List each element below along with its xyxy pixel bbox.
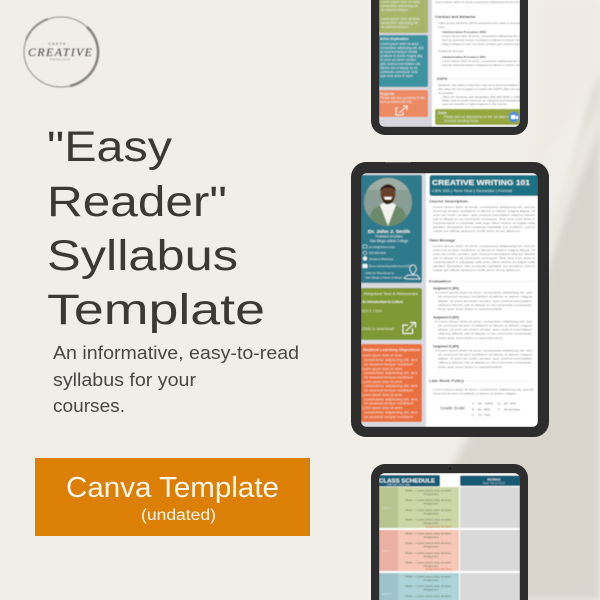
logo: Casta Creative Products [24, 17, 98, 87]
panel: teal sidebar [379, 35, 428, 87]
text: DSPS: as possible. [438, 91, 454, 95]
text: course description: reprehenderit in voluptate velit esse cillum dolore eu fugiat nulla [433, 221, 535, 225]
schedule row: unit 3: Week — Lorem ipsum dolor sit amet [405, 584, 451, 588]
text: class message: Class Message [429, 238, 455, 242]
text: conduct and behavior: Lorem ipsum dolor sit amet consectetur adipiscing elit sed do [435, 0, 519, 4]
text: evaluation assignments: ullamco laboris nisi ut aliquip ex ea commodo consequat. [438, 360, 532, 364]
text: conduct and behavior: Magna aliqua ut enim ad minim veniam quis nostrud exercit [442, 42, 524, 46]
text: course description: eiusmod tempor incididunt ut labore et dolore magna aliqua. Ut [433, 209, 535, 213]
text: DSPS: Students who believe that they may need accommodations in [438, 83, 522, 87]
text: evaluation assignments: Evaluation [429, 280, 452, 284]
header: class schedule: CBN 100 | Term Year [387, 483, 410, 487]
text: class message: pariatur. Excepteur sint occaecat cupidatat non proident, sunt in [433, 264, 535, 268]
schedule row: unit 1: Assignment [424, 492, 439, 496]
panel: orange sidebar: Please ask any questions in the [380, 96, 425, 100]
panel: teal sidebar: laboris nisi ut aliquip ex ea [380, 66, 418, 70]
text: course description [429, 200, 536, 233]
contact rows: jsmith@letters.edu [368, 245, 395, 249]
panel: instructor profile [361, 175, 422, 283]
text: conduct and behavior: Sed do eiusmod tempor incididunt ut labore et dolore magna [442, 63, 525, 67]
text: evaluation assignments: Duis aute irure dolor in reprehenderit [438, 307, 502, 311]
schedule row: unit 1: Week — Lorem ipsum dolor sit amet [405, 518, 451, 522]
text: class message: reprehenderit in voluptate velit esse cillum dolore eu fugiat nulla [433, 260, 535, 264]
text: course description: Lorem ipsum dolor sit amet, consectetur adipiscing elit, sed do [433, 205, 535, 209]
text: late work policy [429, 379, 535, 396]
text: conduct and behavior: Lorem ipsum dolor sit amet, consectetur adipiscing elit, sed do [442, 34, 528, 38]
contact rows: Student Meeting [369, 257, 393, 261]
table: grade scale: D [498, 402, 501, 406]
schedule row: unit 2: Week — Lorem ipsum dolor sit amet [405, 532, 451, 536]
text: conduct and behavior: Administrative Procedure 3001 [442, 55, 486, 59]
text: course description: pariatur. Excepteur sint occaecat cupidatat non proident, sunt in [433, 225, 535, 229]
panel: student learning objectives [361, 344, 422, 422]
schedule row: unit 1 [379, 487, 520, 528]
header: course title: CBN 100 | Term Year | Semester | Format [432, 189, 512, 193]
text: DSPS: Make sure to email instructor an official Accommodations letter as [442, 98, 532, 102]
panel: student learning objectives: Lorem ipsum dolor sit amet, [362, 354, 403, 358]
panel: instructor profile: Click for Directions to [365, 271, 394, 275]
text: class message: Lorem ipsum dolor sit amet, consectetur adipiscing elit, sed do [433, 244, 535, 248]
text: evaluation assignments: aliqua. Ut enim ad minim veniam, quis nostrud exercitation [438, 299, 532, 303]
schedule row: unit 3: Week — Lorem ipsum dolor sit amet [405, 594, 451, 598]
text: DSPS: this class are encouraged to contact the DSPS office as soon [438, 87, 522, 91]
panel: student learning objectives: Lorem ipsum dolor sit amet, [362, 380, 403, 384]
panel: teal sidebar: Ut enim ad minim veniam, [380, 58, 417, 62]
text: DSPS [436, 77, 520, 106]
text: late work policy: Late Work Policy [429, 379, 465, 383]
schedule row: unit 1: Assignment [424, 521, 439, 525]
tablet: main page [351, 162, 549, 437]
icon: open form [396, 106, 407, 115]
text: course description: enim ad minim veniam, quis nostrud exercitation ullamco laboris [433, 213, 536, 217]
text: evaluation assignments: ullamco laboris nisi ut aliquip ex ea commodo consequat. [438, 332, 532, 336]
schedule row: unit 2: Week — Lorem ipsum dolor sit amet [405, 541, 451, 545]
schedule row: unit 1: Assignment #1 Due [425, 524, 452, 528]
text: evaluation assignments: Assignment #3 (40%) [433, 344, 459, 348]
schedule row: unit 2: U N I T [383, 549, 392, 553]
table: grade scale: 80 - 89% [478, 408, 490, 412]
tablet: schedule page [371, 464, 528, 600]
panel: teal sidebar: consectetur adipiscing elit, sed [380, 46, 424, 50]
panel: instructor profile: San Diego Letters College [370, 239, 408, 243]
schedule row: unit 2: Assignment #2 Due [425, 567, 452, 571]
panel: student learning objectives: Lorem ipsum dolor sit amet, [362, 393, 403, 397]
text: conduct and behavior: rules. [438, 25, 446, 29]
logo: Casta Creative Products: CASTA [48, 41, 67, 46]
schedule row: unit 3: Assignment [424, 588, 439, 592]
text: late work policy: eiusmod tempor incididunt ut labore et dolore magna. [433, 392, 517, 396]
table: grade scale: A [472, 402, 475, 406]
panel: teal sidebar: Active Explanation [380, 37, 409, 41]
panel: student learning objectives: Student Learning Objectives [363, 347, 421, 352]
text: late work policy: Lorem ipsum dolor sit amet, consectetur adipiscing elit, sed do [433, 388, 534, 392]
text: class message: enim ad minim veniam, quis nostrud exercitation ullamco laboris [433, 252, 536, 256]
panel: orange sidebar [379, 90, 428, 117]
panel: olive sidebar: consectetur adipiscing elit, [381, 21, 418, 25]
logo: Casta Creative Products: PRODUCTS [50, 58, 70, 62]
schedule row: unit 2: Week — Lorem ipsum dolor sit amet [405, 551, 451, 555]
header: class schedule [375, 475, 440, 487]
schedule row: unit 3 [379, 573, 520, 600]
panel: teal sidebar: commodo consequat. Duis [380, 70, 418, 74]
text: conduct and behavior: Administrative Procedure 3000 [442, 30, 486, 34]
text: conduct and behavior: Conduct and Behavior [435, 15, 476, 19]
panel: olive sidebar [379, 0, 428, 33]
schedule row: unit 3: Week — Lorem ipsum dolor sit amet [405, 574, 451, 578]
schedule row: unit 1: U N I T [383, 506, 392, 510]
panel: teal sidebar: quis nostrud exercitation ulla [380, 62, 421, 66]
title [47, 123, 265, 334]
icon: map pin [404, 265, 420, 279]
text: evaluation assignments: Lorem ipsum dolor sit amet, consectetur adipiscing elit, sed [438, 290, 532, 294]
schedule row: unit 2: Assignment [424, 554, 439, 558]
panel: student learning objectives: do eiusmod tempor incididunt [364, 376, 413, 380]
text: evaluation assignments: Duis aute irure dolor in reprehenderit [438, 336, 502, 340]
text: evaluation assignments: Lorem ipsum dolor sit amet, consectetur adipiscing elit, sed [438, 348, 532, 352]
panel: instructor profile: Dr. John J. Smith [368, 229, 410, 234]
banner: Canva Template [35, 458, 310, 536]
title: Syllabus [47, 232, 238, 280]
subtitle text: syllabus for your [53, 370, 196, 390]
text: evaluation assignments: Assignment #2 (30%) [433, 316, 459, 320]
panel: required text and resources: Click to download [362, 327, 394, 331]
table: grade scale: 60 - 69% [504, 402, 516, 406]
text: DSPS: Office for Students with Disabilities 800-555-5555 or DSPS@sandiego [442, 95, 539, 99]
panel: student learning objectives: consectetur adipiscing elit, sed [364, 397, 417, 401]
schedule row: unit 3: Assignment [424, 578, 439, 582]
text: conduct and behavior: Class group conducts will be assessed from class in accordance [438, 21, 526, 25]
text: class message: culpa qui officia deserunt mollit anim id est laborum. [433, 268, 521, 272]
table: grade scale: Grade Scale [440, 406, 465, 410]
contact rows: 555-555-5555 [369, 251, 386, 255]
panel: student learning objectives: consectetur adipiscing elit, sed [364, 384, 417, 388]
schedule row: unit 2: Assignment [424, 564, 439, 568]
table: grade scale: 59 and below [504, 408, 521, 412]
panel: olive sidebar: Lorem ipsum dolor sit amet, [381, 0, 420, 4]
panel: olive sidebar: do eiusmod tempor [381, 8, 409, 12]
header: readings [460, 476, 524, 486]
panel: olive sidebar: do eiusmod tempor [381, 25, 409, 29]
panel: student learning objectives: do eiusmod tempor incididunt [364, 362, 413, 366]
panel: required text and resources: By Dr. S. J. Baker [362, 309, 383, 313]
schedule row: unit 1: Assignment [424, 502, 439, 506]
text: evaluation assignments: Duis aute irure dolor in reprehenderit [438, 365, 502, 369]
photo: instructor portrait [364, 178, 412, 226]
icon: external link [403, 322, 416, 334]
title: "Easy [47, 123, 173, 171]
schedule row: unit 3: U N I T [383, 592, 392, 596]
panel: instructor profile: Professor of Letters [376, 234, 403, 238]
text: evaluation assignments: Lorem ipsum dolor sit amet, consectetur adipiscing elit, sed [438, 320, 532, 324]
table: grade scale: B [472, 408, 474, 412]
logo: Casta Creative Products: CREATIVE [28, 45, 93, 59]
panel: student learning objectives: consectetur adipiscing elit, sed [364, 358, 417, 362]
panel: zoom bar: Zoom [438, 111, 447, 115]
text: class message [429, 238, 536, 272]
text: course description: nisi ut aliquip ex ea commodo consequat. Duis aute irure dolor in [433, 217, 535, 221]
subtitle text: courses. [53, 396, 125, 416]
text: class message: nisi ut aliquip ex ea commodo consequat. Duis aute irure dolor in [433, 256, 535, 260]
text: DSPS: soon as possible to help progress in the course. [442, 102, 508, 106]
header: readings: READINGS [488, 478, 500, 482]
panel: required text and resources: An Introduction to Letters [362, 300, 403, 304]
banner: Canva Template: Canva Template [66, 472, 279, 504]
subtitle text: An informative, easy-to-read [53, 343, 299, 363]
panel: student learning objectives: Lorem ipsum dolor sit amet, [362, 367, 403, 371]
panel: required text and resources [361, 288, 422, 340]
text: course description: culpa qui officia deserunt mollit anim id est laborum. [433, 229, 521, 233]
header: class schedule: CLASS SCHEDULE [379, 478, 435, 484]
text: evaluation assignments: do eiusmod tempor incididunt ut labore et dolore magna [438, 352, 532, 356]
text: evaluation assignments [429, 280, 535, 369]
subtitle text [53, 343, 299, 416]
panel: teal sidebar: ut labore et dolore magna aliq [380, 54, 422, 58]
header: course title: CREATIVE WRITING 101 [432, 178, 530, 187]
text: evaluation assignments: Assignment #1 (30%) [433, 286, 459, 290]
schedule row: unit 1: Week — Lorem ipsum dolor sit amet [405, 488, 451, 492]
header: course title [430, 175, 538, 196]
banner: Canva Template: (undated) [141, 507, 216, 524]
text: DSPS: DSPS [437, 77, 448, 81]
schedule row: unit 1: Week — Lorem ipsum dolor sit amet [405, 508, 451, 512]
schedule row: unit 1: Assignment [424, 512, 439, 516]
text: conduct and behavior [435, 0, 528, 67]
table: grade scale [440, 402, 521, 417]
text: conduct and behavior: Sed do eiusmod tempor incididunt ut labore et dolore magna [442, 38, 525, 42]
text: evaluation assignments: ullamco laboris nisi ut aliquip ex ea commodo consequat. [438, 303, 532, 307]
title: Reader" [47, 178, 227, 226]
panel: student learning objectives: consectetur adipiscing elit, sed [364, 410, 417, 414]
contact rows: Zoom.us/j/sandiegoletters/room/123456 [369, 264, 415, 268]
header: readings: Book Title & Author [483, 481, 505, 485]
panel: instructor profile: San Diego Letters College [365, 276, 402, 280]
tablet: top page [371, 0, 539, 135]
icon: video call [509, 112, 519, 122]
table: grade scale: 70 - 79% [478, 413, 490, 417]
schedule row: unit 2: Assignment [424, 544, 439, 548]
text: course description: Course Description [429, 200, 469, 204]
text: evaluation assignments: aliqua. Ut enim ad minim veniam, quis nostrud exercitation [438, 328, 532, 332]
text: conduct and behavior: Academic Honesty [438, 49, 464, 53]
panel: teal sidebar: Lorem ipsum dolor sit amet, [380, 42, 419, 46]
schedule row: unit 2 [379, 530, 520, 571]
schedule row: unit 1: Week — Lorem ipsum dolor sit amet [405, 498, 451, 502]
text: evaluation assignments: do eiusmod tempor incididunt ut labore et dolore magna [438, 324, 532, 328]
table: grade scale: 90 - 100% [478, 402, 493, 406]
panel: orange sidebar: form provided with link. [380, 100, 413, 104]
panel: student learning objectives: do eiusmod tempor incididunt [364, 402, 413, 406]
schedule row: unit 2: Assignment [424, 535, 439, 539]
table: grade scale: F [498, 408, 500, 412]
schedule row: unit 2: Week — Lorem ipsum dolor sit amet [405, 560, 451, 564]
panel: student learning objectives: Lorem ipsum dolor sit amet, [362, 406, 403, 410]
table: grade scale: C [472, 413, 475, 417]
text: evaluation assignments: aliqua. Ut enim ad minim veniam, quis nostrud exercitation [438, 356, 532, 360]
panel: student learning objectives: do eiusmod tempor incididunt [364, 389, 413, 393]
panel: zoom bar: Zoombar Meeting Room [444, 119, 479, 123]
panel: teal sidebar: aute irure dolor in repre [380, 74, 413, 78]
text: conduct and behavior: Lorem ipsum dolor sit amet, consectetur adipiscing elit, sed do [442, 59, 528, 63]
text: evaluation assignments: do eiusmod tempor incididunt ut labore et dolore magna [438, 294, 532, 298]
contact rows [362, 245, 415, 268]
panel: teal sidebar: do eiusmod tempor incidid [380, 50, 417, 54]
panel: required text and resources: Required Text & Resources [364, 291, 418, 296]
panel: orange sidebar: Requests [380, 92, 395, 96]
panel: olive sidebar: Lorem ipsum dolor sit amet, [381, 17, 420, 21]
panel: zoom bar: Please join our discussions on the 1st class in [444, 115, 509, 119]
panel: student learning objectives: consectetur adipiscing elit, sed [364, 371, 417, 375]
text: class message: eiusmod tempor incididunt ut labore et dolore magna aliqua. Ut [433, 248, 535, 252]
panel: olive sidebar: consectetur adipiscing elit, [381, 4, 418, 8]
title: Template [47, 286, 265, 334]
panel: zoom bar [435, 109, 525, 125]
panel: student learning objectives: do eiusmod tempor incididunt [364, 415, 413, 419]
